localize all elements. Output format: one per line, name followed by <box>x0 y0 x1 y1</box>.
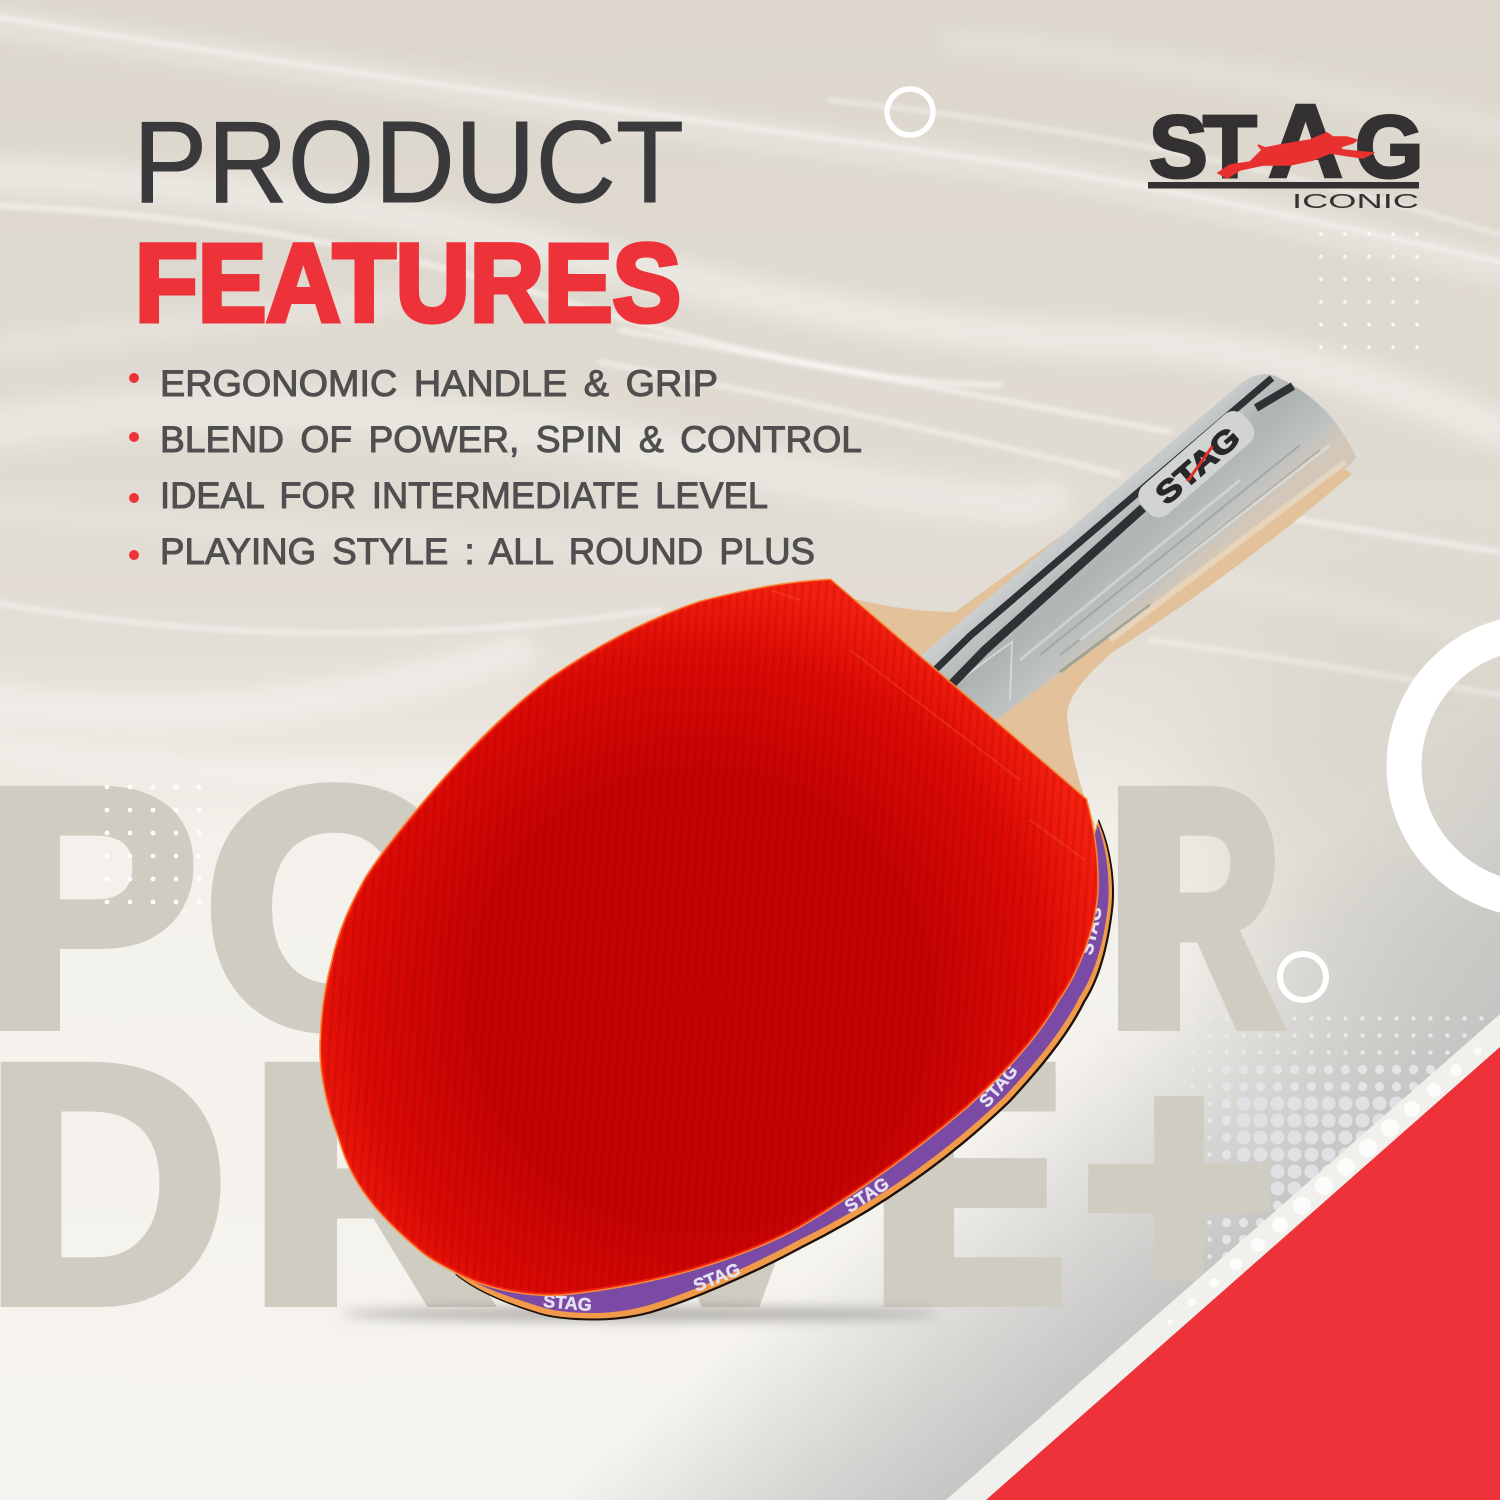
logo underline <box>1148 182 1419 188</box>
orange rim of rubber <box>322 581 1096 1294</box>
big background word: DRIVE+: R <box>248 994 493 1373</box>
feature 4: PLAYING STYLE : ALL ROUND PLUS <box>160 531 815 572</box>
edge tape logos: STAG <box>1076 905 1106 957</box>
edge tape logos: STAG <box>542 1291 593 1315</box>
big background word: POWER: E <box>840 718 1066 1097</box>
white diagonal band <box>946 1014 1500 1500</box>
logo wordmark: T <box>1203 97 1257 196</box>
decorative ring: large right <box>1404 632 1500 900</box>
red rubber face <box>322 581 1096 1294</box>
purple edge tape <box>462 825 1109 1313</box>
big background word: DRIVE+: + <box>1080 994 1278 1373</box>
wooden blade and shoulder <box>835 400 1352 860</box>
big background word: DRIVE+: V <box>617 994 845 1373</box>
feature 1: ERGONOMIC HANDLE & GRIP <box>160 363 718 404</box>
rubber crease marks <box>770 590 1085 860</box>
edge tape logos: STAG <box>841 1173 893 1217</box>
handle silver face <box>918 374 1356 723</box>
decorative ring: top <box>887 89 933 135</box>
feature list <box>129 363 862 572</box>
big background word: POWER: O <box>203 718 467 1097</box>
icon: leaping dog <box>1218 133 1373 178</box>
paddle <box>322 374 1356 1321</box>
handle logo badge <box>1133 405 1260 523</box>
halftone dots: lower right <box>1184 1010 1500 1350</box>
handle logo dog mark <box>1181 446 1219 481</box>
handle grain <box>960 445 1345 700</box>
title line 2: FEATURES <box>135 222 681 345</box>
decorative ring: lower right <box>1280 954 1326 1000</box>
big background word: DRIVE+ <box>0 994 1278 1373</box>
feature 3: IDEAL FOR INTERMEDIATE LEVEL <box>160 475 768 516</box>
brand logo <box>1148 84 1423 213</box>
paddle ground shadow <box>340 1307 940 1321</box>
edge tape logos: STAG <box>975 1061 1022 1111</box>
red corner triangle <box>986 1047 1500 1500</box>
rubber ribbed texture <box>322 581 1096 1294</box>
feature 2: BLEND OF POWER, SPIN & CONTROL <box>160 419 862 460</box>
title <box>133 97 684 345</box>
logo wordmark: G <box>1355 97 1423 196</box>
edge tape logos <box>542 905 1106 1315</box>
big background word: POWER <box>0 718 1284 1097</box>
edge tape logos: STAG <box>690 1259 743 1296</box>
big background word: DRIVE+: E <box>869 994 1068 1373</box>
rubber edge: orange <box>460 825 1110 1317</box>
logo sub-brand: ICONIC <box>1292 191 1419 213</box>
big background word: DRIVE+: I <box>530 994 624 1373</box>
handle dark stripes <box>933 378 1293 686</box>
rubber edge: black backing <box>461 826 1112 1318</box>
halftone dots: top right <box>1315 228 1421 352</box>
handle logo text: STAG <box>1149 421 1247 511</box>
logo wordmark: A <box>1268 84 1343 200</box>
big background word: POWER: R <box>1106 718 1284 1097</box>
big background word: POWER: W <box>500 718 823 1097</box>
title line 1: PRODUCT <box>133 97 684 227</box>
halftone dots: over letter P <box>101 781 211 906</box>
logo wordmark: S <box>1149 97 1208 196</box>
